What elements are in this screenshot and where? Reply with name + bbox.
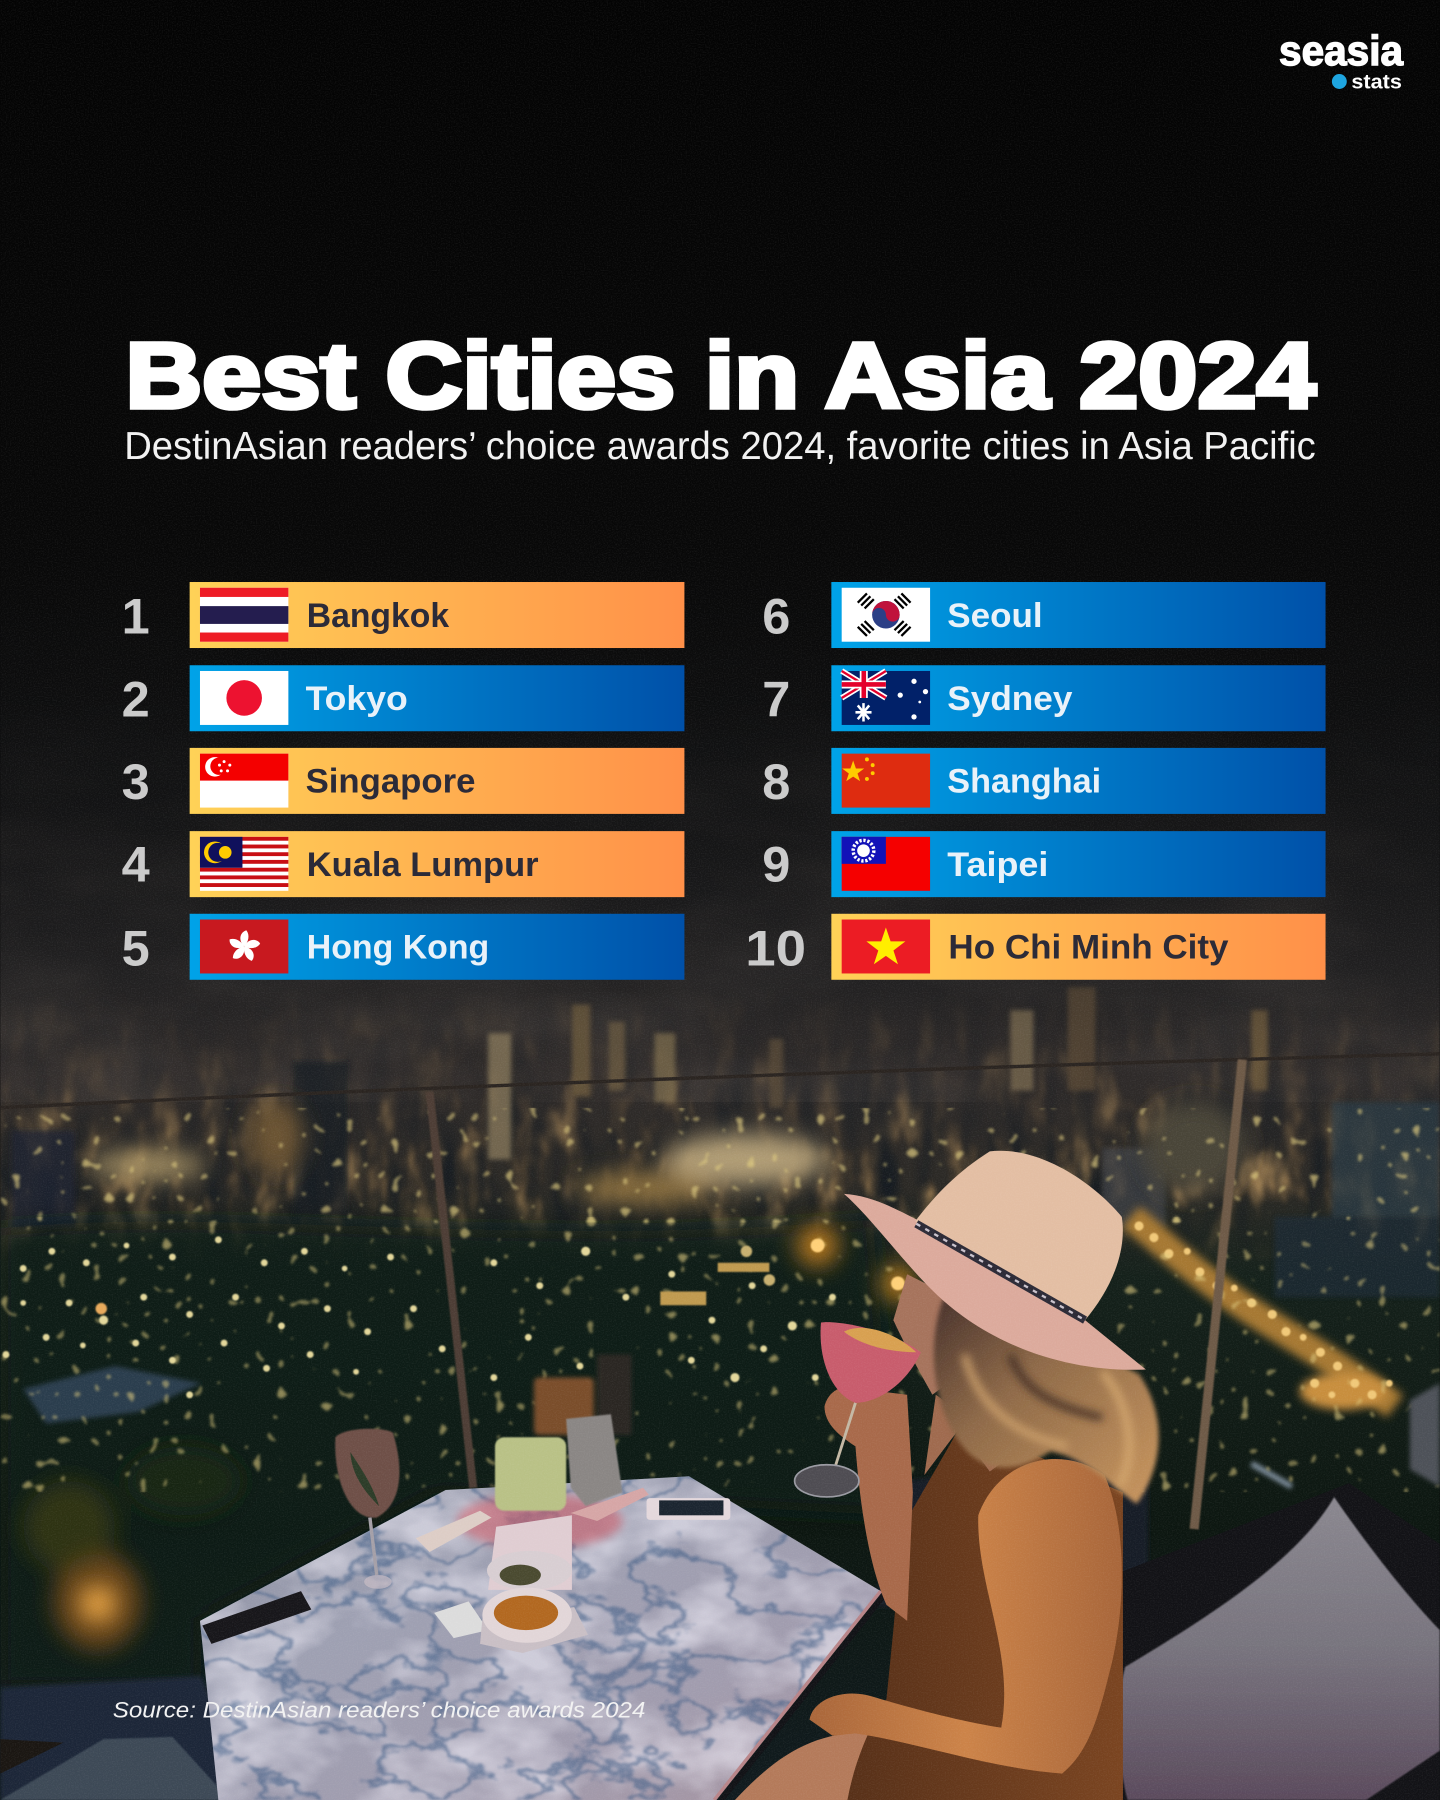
rank 3: Singapore: Singapore xyxy=(306,763,475,801)
rank 2: Tokyo: 2 xyxy=(122,670,150,727)
dress xyxy=(847,1429,1123,1800)
rank 6: Seoul xyxy=(762,582,1326,648)
rank 6: Seoul: Seoul xyxy=(947,597,1043,635)
rank 8: Shanghai: Shanghai xyxy=(947,763,1101,801)
logo: seasia stats xyxy=(1279,28,1404,93)
scattered bokeh texture xyxy=(0,1217,1440,1492)
bokeh lights xyxy=(3,1236,905,1398)
wicker sofa xyxy=(1119,1383,1440,1800)
rank 7: Sydney xyxy=(762,665,1326,731)
rank 4: Kuala Lumpur: Kuala Lumpur xyxy=(307,846,539,884)
photo background: rooftop night scene xyxy=(0,716,1440,1800)
rank 1: Bangkok: 1 xyxy=(122,588,150,645)
rank 4: Kuala Lumpur: 4 xyxy=(122,836,150,893)
title: Best Cities in Asia 2024 xyxy=(125,324,1316,428)
rank 5: Hong Kong xyxy=(122,914,684,980)
ranking list: right column xyxy=(745,582,1326,980)
ranking list: left column xyxy=(122,582,684,980)
rank 8: Shanghai xyxy=(762,748,1326,814)
rank 3: Singapore xyxy=(122,748,684,814)
upper arm and back xyxy=(810,1459,1122,1774)
rank 5: Hong Kong: Hong Kong xyxy=(307,929,489,967)
hat xyxy=(844,1151,1146,1370)
thigh and lap xyxy=(735,1733,884,1800)
grey pillow xyxy=(1119,1497,1440,1800)
rank 9: Taipei: Taipei xyxy=(947,846,1048,884)
woman in hat drinking a cocktail xyxy=(735,1151,1159,1800)
logo: seasia stats: stats xyxy=(1351,70,1402,93)
logo: seasia stats: seasia xyxy=(1279,28,1404,74)
right river of lights xyxy=(1131,1217,1395,1410)
napkins and menu cards xyxy=(416,1488,649,1638)
subtitle: DestinAsian readers’ choice awards 2024, favorite cities in Asia Pacific xyxy=(124,425,1316,468)
rank 3: Singapore: 3 xyxy=(122,753,150,810)
road and building bits xyxy=(0,1366,1292,1800)
blurred skyline towers xyxy=(12,987,1440,1297)
candle xyxy=(495,1437,566,1511)
hair xyxy=(934,1297,1159,1504)
black phone xyxy=(202,1591,311,1644)
bottom-left sofa cushion xyxy=(0,1737,230,1800)
warm glows xyxy=(23,1225,914,1650)
rank 7: Sydney: Sydney xyxy=(947,680,1072,718)
rank 5: Hong Kong: 5 xyxy=(122,919,150,976)
rank 10: Ho Chi Minh City: 10 xyxy=(745,919,806,976)
snack bowls xyxy=(480,1551,588,1653)
face xyxy=(893,1274,976,1395)
rank 9: Taipei: 9 xyxy=(762,836,790,893)
marble table xyxy=(200,1414,885,1800)
glowing city band xyxy=(90,1102,1246,1204)
rank 9: Taipei xyxy=(762,831,1326,897)
rank 10: Ho Chi Minh City xyxy=(745,914,1326,980)
rank 7: Sydney: 7 xyxy=(762,670,790,727)
rank 2: Tokyo xyxy=(122,665,684,731)
wine glass xyxy=(335,1429,399,1589)
rank 6: Seoul: 6 xyxy=(762,588,790,645)
white phone xyxy=(647,1498,730,1520)
background candle glow and sign xyxy=(534,1355,632,1435)
rank 1: Bangkok xyxy=(122,582,684,648)
drink behind candle xyxy=(566,1414,622,1506)
source note: Source: DestinAsian readers’ choice awards 2024 xyxy=(113,1697,645,1722)
city texture xyxy=(0,1012,1440,1253)
dark green park xyxy=(0,1219,896,1688)
cocktail glass xyxy=(795,1322,921,1497)
hazy clouds xyxy=(0,870,1324,1102)
rank 10: Ho Chi Minh City: Ho Chi Minh City xyxy=(948,929,1229,967)
rank 8: Shanghai: 8 xyxy=(762,753,790,810)
raised arm and hand xyxy=(824,1387,913,1621)
glass railing xyxy=(0,1054,1440,1529)
rank 2: Tokyo: Tokyo xyxy=(306,680,408,718)
neck xyxy=(924,1395,1016,1475)
dark overlay fading the top of the photo xyxy=(0,0,1440,1033)
rank 4: Kuala Lumpur xyxy=(122,831,684,897)
rank 1: Bangkok: Bangkok xyxy=(307,597,450,635)
city bokeh xyxy=(0,1108,1440,1223)
